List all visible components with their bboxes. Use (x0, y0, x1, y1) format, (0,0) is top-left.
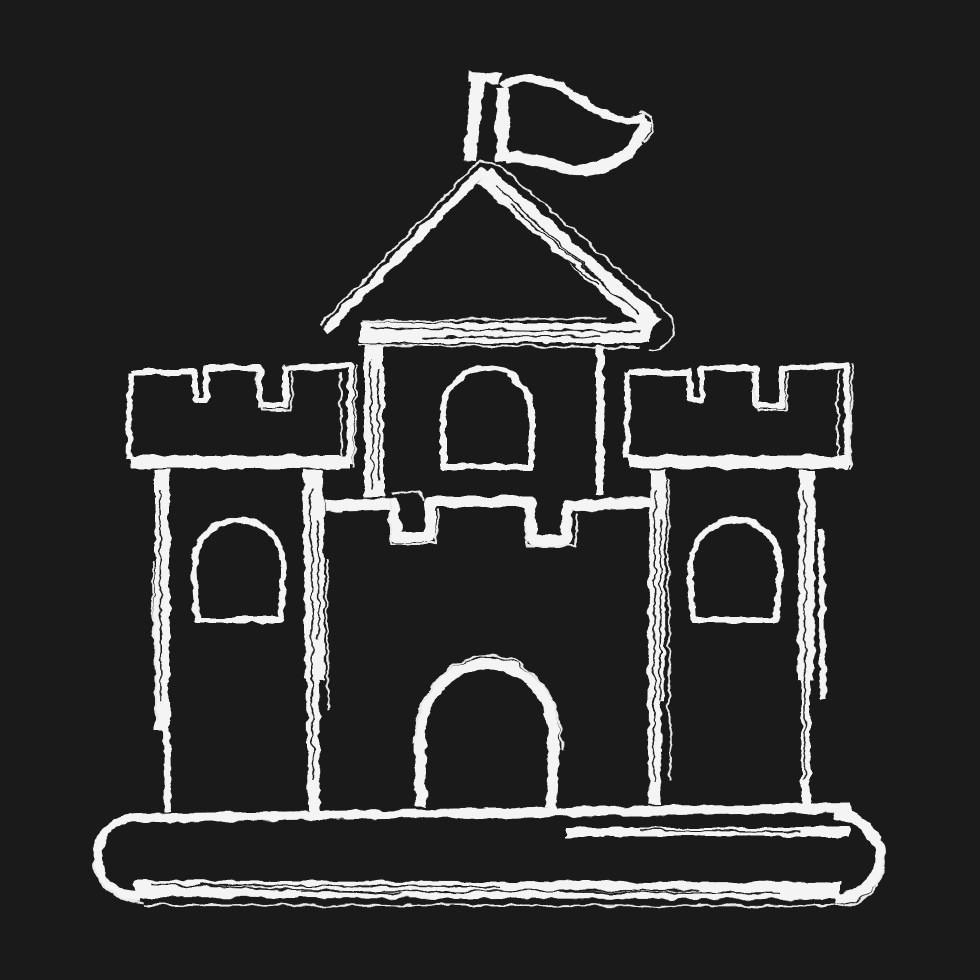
left turret (129, 365, 356, 468)
roof (320, 160, 674, 350)
left window (194, 520, 284, 620)
right tower walls (654, 470, 823, 808)
upper tower (358, 318, 650, 498)
right turret (626, 365, 852, 468)
right window (690, 520, 780, 620)
flag (468, 76, 651, 170)
left tower walls (152, 470, 328, 812)
main gate (414, 656, 562, 808)
central battlement (324, 492, 650, 546)
base platform (94, 808, 885, 906)
upper window (443, 368, 532, 467)
icon: castle (94, 76, 885, 906)
